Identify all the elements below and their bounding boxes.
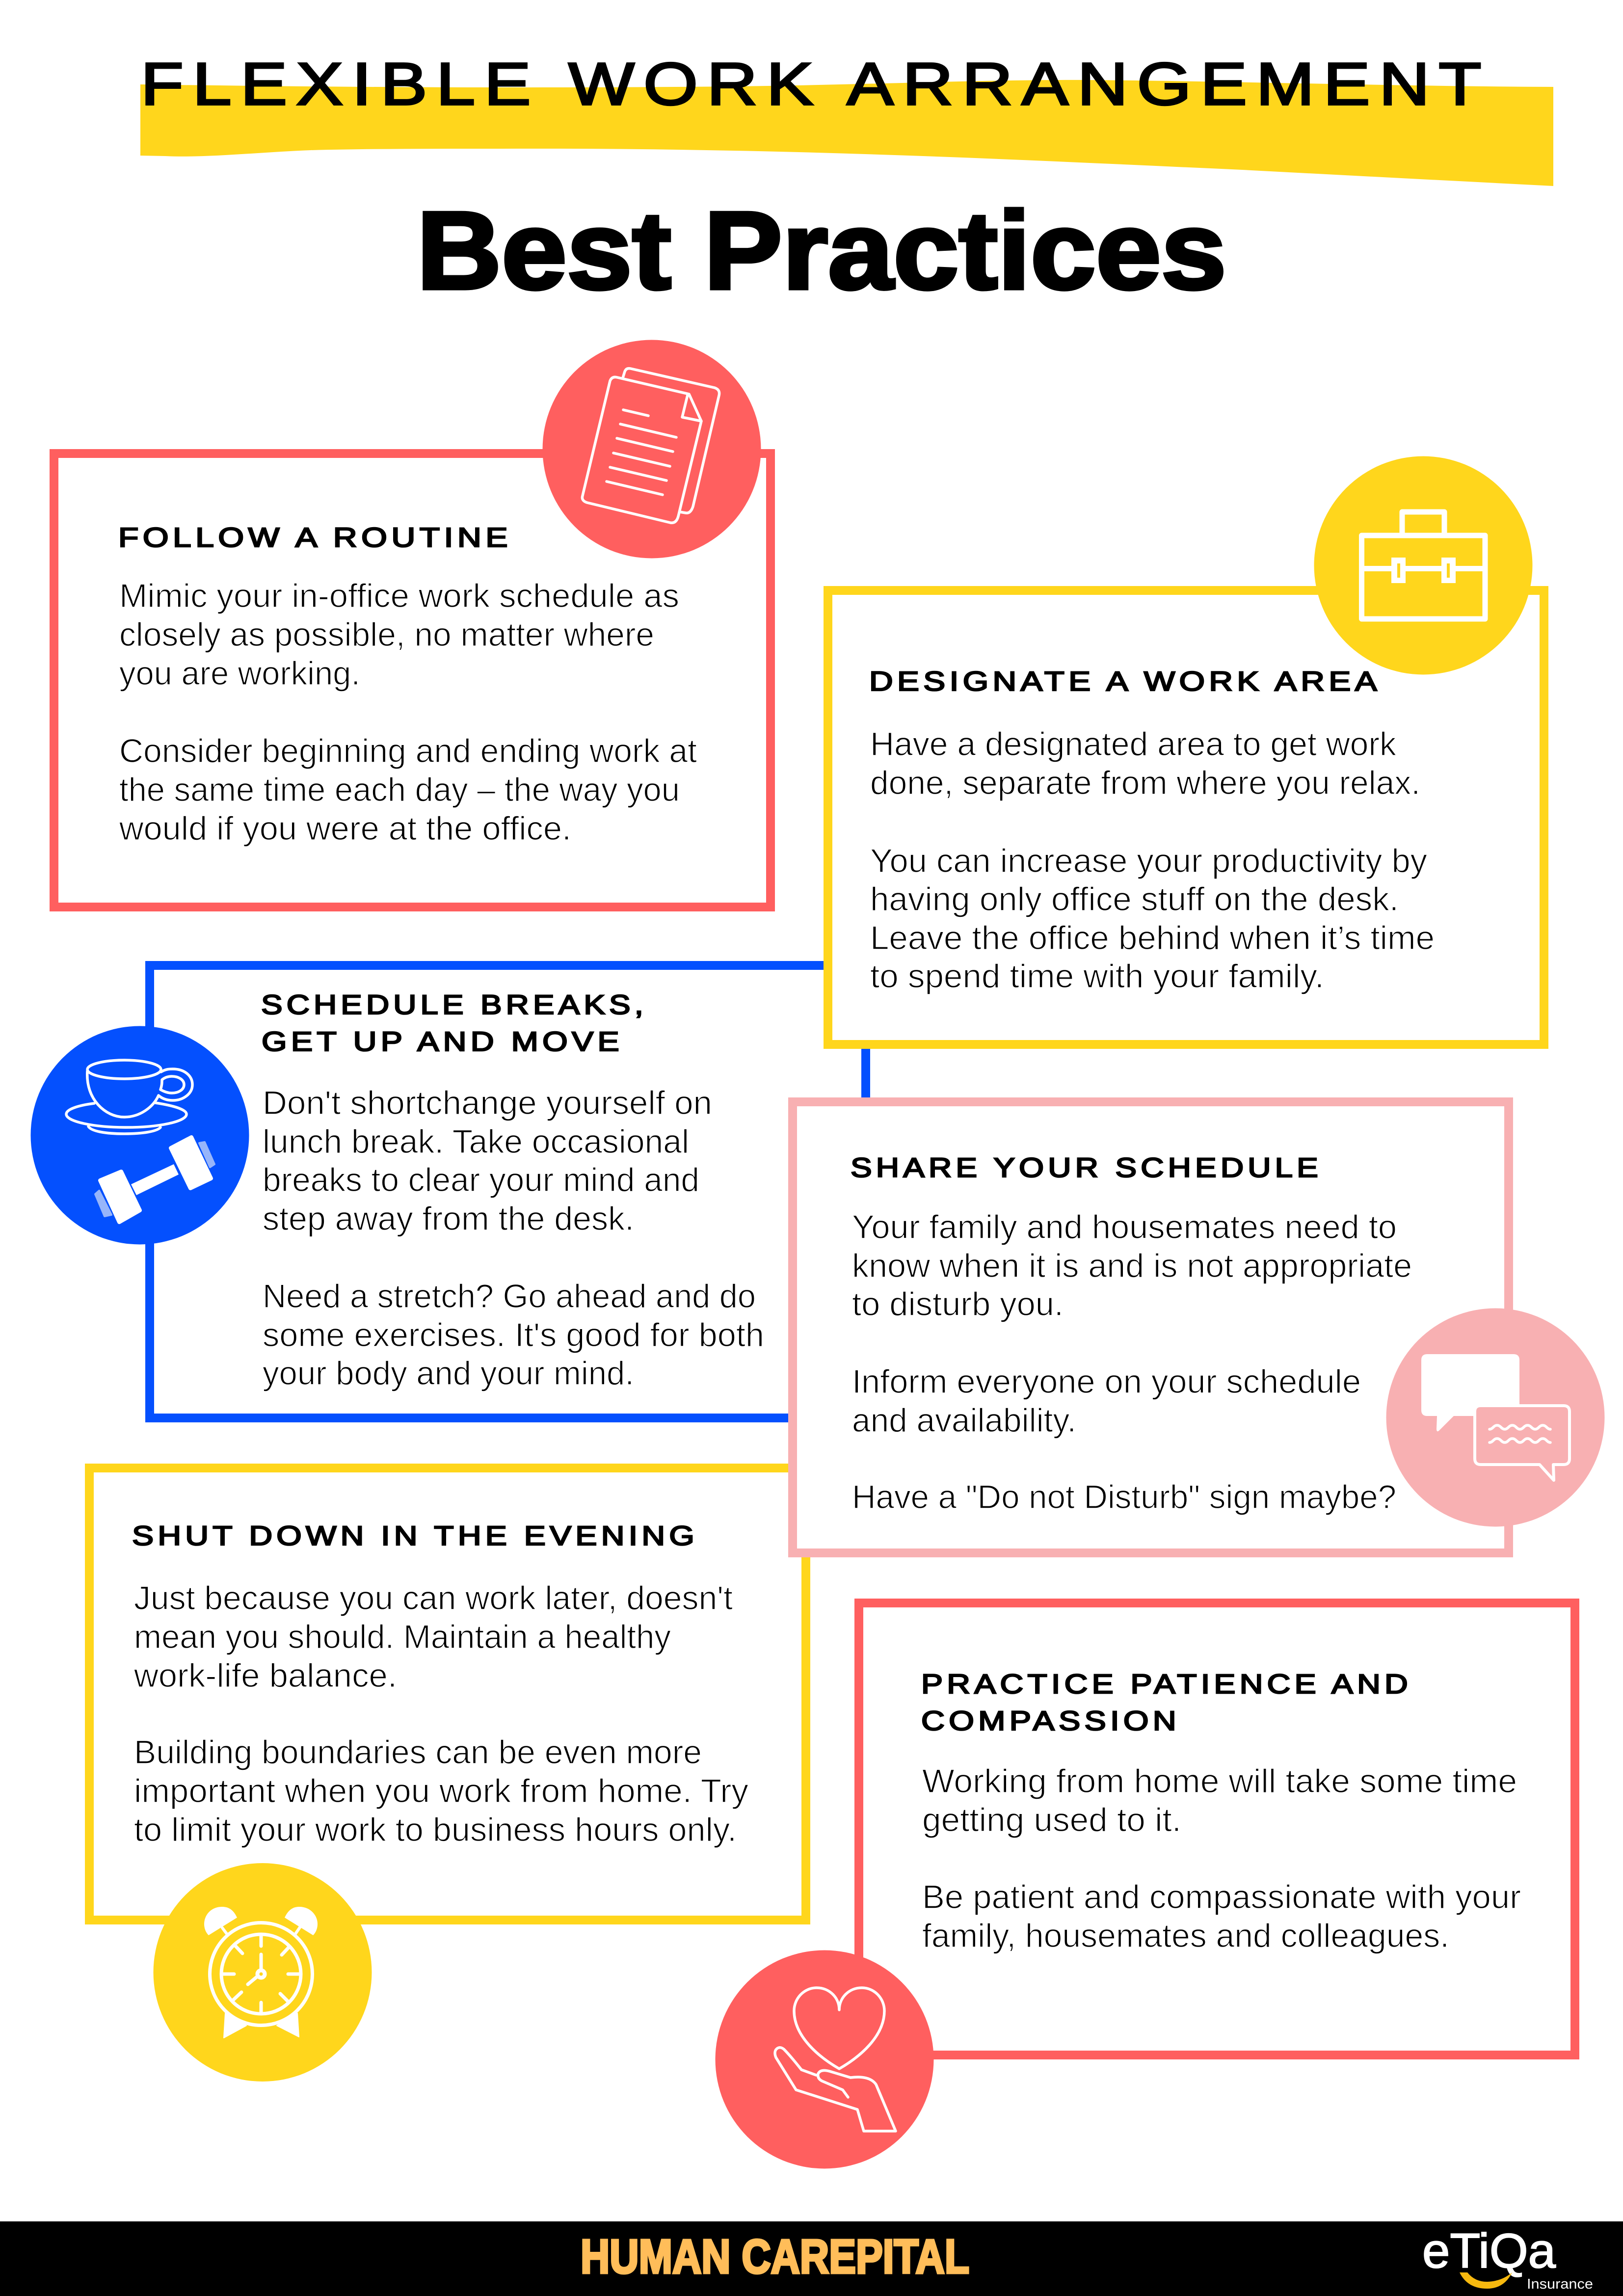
body text: follow a routine: you are working. — [119, 655, 360, 692]
body text: schedule breaks — [263, 1084, 764, 1392]
body text: follow a routine: Mimic your in-office work schedule as — [119, 577, 679, 614]
body text: share your schedule: Your family and housemates need to — [852, 1208, 1397, 1246]
panel: shut down in the evening — [89, 1468, 806, 1920]
body text: shut down in the evening: mean you should. Maintain a healthy — [134, 1618, 671, 1655]
heading: shut down in the evening: SHUT DOWN IN THE EVENING — [132, 1520, 698, 1551]
body text: designate a work area: done, separate from where you relax. — [870, 764, 1420, 801]
title: flexible work arrangement: FLEXIBLE WORK ARRANGEMENT — [141, 51, 1490, 117]
yellow brush band behind title — [140, 80, 1553, 186]
body text: schedule breaks: step away from the desk. — [263, 1200, 634, 1237]
body text: share your schedule: to disturb you. — [852, 1285, 1064, 1323]
body text: practice patience and compassion: Working from home will take some time — [922, 1762, 1517, 1800]
icon: briefcase — [1314, 456, 1532, 674]
body text: follow a routine: would if you were at the office. — [119, 810, 571, 847]
body text: shut down in the evening: work-life balance. — [133, 1657, 397, 1694]
body text: shut down in the evening: to limit your work to business hours only. — [134, 1811, 737, 1848]
body text: share your schedule: know when it is and is not appropriate — [852, 1247, 1412, 1284]
heading: schedule breaks: SCHEDULE BREAKS, — [261, 989, 647, 1020]
body text: designate a work area: Leave the office behind when it’s time — [870, 919, 1435, 957]
body text: designate a work area: to spend time with your family. — [870, 958, 1324, 995]
logo: etiqa insurance: eTiQa — [1422, 2223, 1556, 2278]
body text: shut down in the evening — [133, 1579, 748, 1848]
icon: dumbbell — [95, 1137, 214, 1222]
logo: etiqa insurance — [1422, 2223, 1593, 2292]
body text: share your schedule: Have a "Do not Disturb" sign maybe? — [852, 1478, 1396, 1516]
body text: practice patience and compassion: getting used to it. — [922, 1801, 1181, 1839]
panel: share your schedule — [793, 1102, 1509, 1553]
body text: schedule breaks: Need a stretch? Go ahead and do — [263, 1278, 756, 1315]
body text: shut down in the evening: important when you work from home. Try — [134, 1772, 748, 1810]
icon: speech bubbles — [1386, 1308, 1605, 1526]
heading: designate a work area: DESIGNATE A WORK AREA — [869, 666, 1381, 696]
panel: designate a work area — [828, 590, 1544, 1044]
body text: designate a work area: having only office stuff on the desk. — [870, 881, 1399, 918]
body text: follow a routine: Consider beginning and ending work at — [119, 732, 697, 770]
heading: practice patience and compassion: PRACTICE PATIENCE AND — [921, 1668, 1412, 1699]
body text: follow a routine — [119, 577, 697, 847]
icon: documents — [543, 340, 761, 559]
icon: heart in hand — [716, 1950, 933, 2168]
body text: practice patience and compassion: family, housemates and colleagues. — [922, 1917, 1449, 1954]
panel: schedule breaks — [150, 965, 866, 1418]
body text: practice patience and compassion — [922, 1762, 1521, 1954]
heading: share your schedule: SHARE YOUR SCHEDULE — [851, 1152, 1322, 1183]
body text: share your schedule: Inform everyone on your schedule — [852, 1363, 1361, 1400]
body text: shut down in the evening: Building boundaries can be even more — [134, 1734, 702, 1771]
logo: etiqa insurance: Insurance — [1527, 2276, 1593, 2292]
heading: practice patience and compassion: COMPASSION — [921, 1705, 1180, 1736]
heading: schedule breaks — [261, 989, 647, 1057]
body text: practice patience and compassion: Be patient and compassionate with your — [922, 1878, 1521, 1916]
body text: schedule breaks: breaks to clear your mind and — [263, 1161, 699, 1199]
body text: schedule breaks: some exercises. It's good for both — [263, 1316, 764, 1354]
body text: schedule breaks: your body and your mind. — [263, 1355, 634, 1392]
heading: follow a routine: FOLLOW A ROUTINE — [118, 522, 512, 553]
body text: schedule breaks: Don't shortchange yourself on — [263, 1084, 712, 1121]
body text: share your schedule: and availability. — [852, 1402, 1076, 1439]
body text: follow a routine: closely as possible, no matter where — [119, 616, 654, 653]
icon: alarm clock — [153, 1863, 372, 2082]
icon: coffee cup — [66, 1060, 192, 1134]
body text: shut down in the evening: Just because you can work later, doesn't — [134, 1579, 733, 1617]
body text: schedule breaks: lunch break. Take occasional — [263, 1123, 689, 1160]
body text: designate a work area: Have a designated area to get work — [870, 725, 1397, 763]
body text: share your schedule — [852, 1208, 1412, 1516]
panel: practice patience and compassion — [859, 1603, 1575, 2055]
heading: schedule breaks: GET UP AND MOVE — [262, 1026, 623, 1057]
body text: designate a work area: You can increase your productivity by — [870, 842, 1427, 880]
heading: practice patience and compassion — [921, 1668, 1412, 1736]
footer text: human carepital: HUMAN CAREPITAL — [581, 2230, 969, 2283]
panel: follow a routine — [54, 454, 771, 907]
body text: designate a work area — [870, 725, 1435, 995]
heading: best practices: Best Practices — [417, 188, 1226, 312]
footer bar — [0, 2221, 1623, 2296]
icon: cup and dumbbell — [30, 1026, 249, 1245]
body text: follow a routine: the same time each day – the way you — [119, 771, 680, 808]
